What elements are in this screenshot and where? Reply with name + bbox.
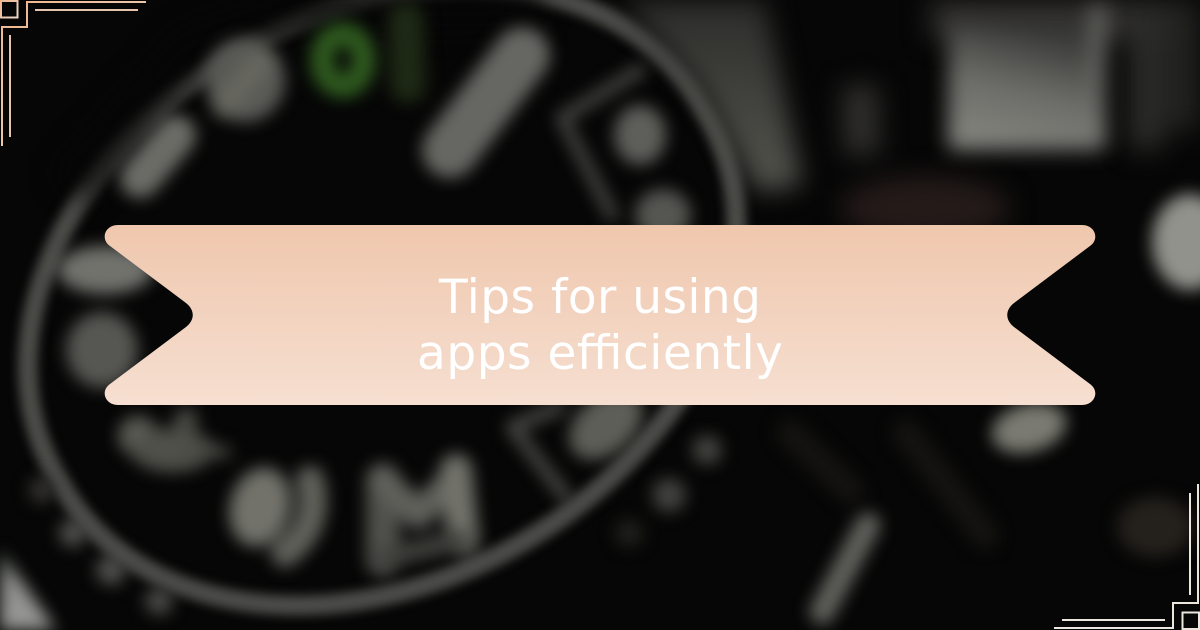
title line 1: Tips for using	[438, 270, 761, 325]
camera body, upper right	[620, 0, 1200, 240]
corner ornament: bottom right	[1054, 484, 1199, 629]
dial symbols, lower arc	[29, 377, 722, 615]
bright wedge, bottom-left corner	[0, 550, 56, 630]
shadow dimming the top of the ring	[70, 6, 540, 190]
title line 2: apps efficiently	[417, 326, 783, 381]
title	[417, 270, 783, 381]
dial ring	[28, 0, 736, 605]
corner ornament: top left	[1, 1, 146, 146]
dial symbols, upper arc	[57, 20, 691, 388]
highlights, right and bottom	[790, 194, 1200, 612]
ribbon banner	[105, 225, 1095, 405]
bright viewfinder block	[948, 6, 1106, 150]
